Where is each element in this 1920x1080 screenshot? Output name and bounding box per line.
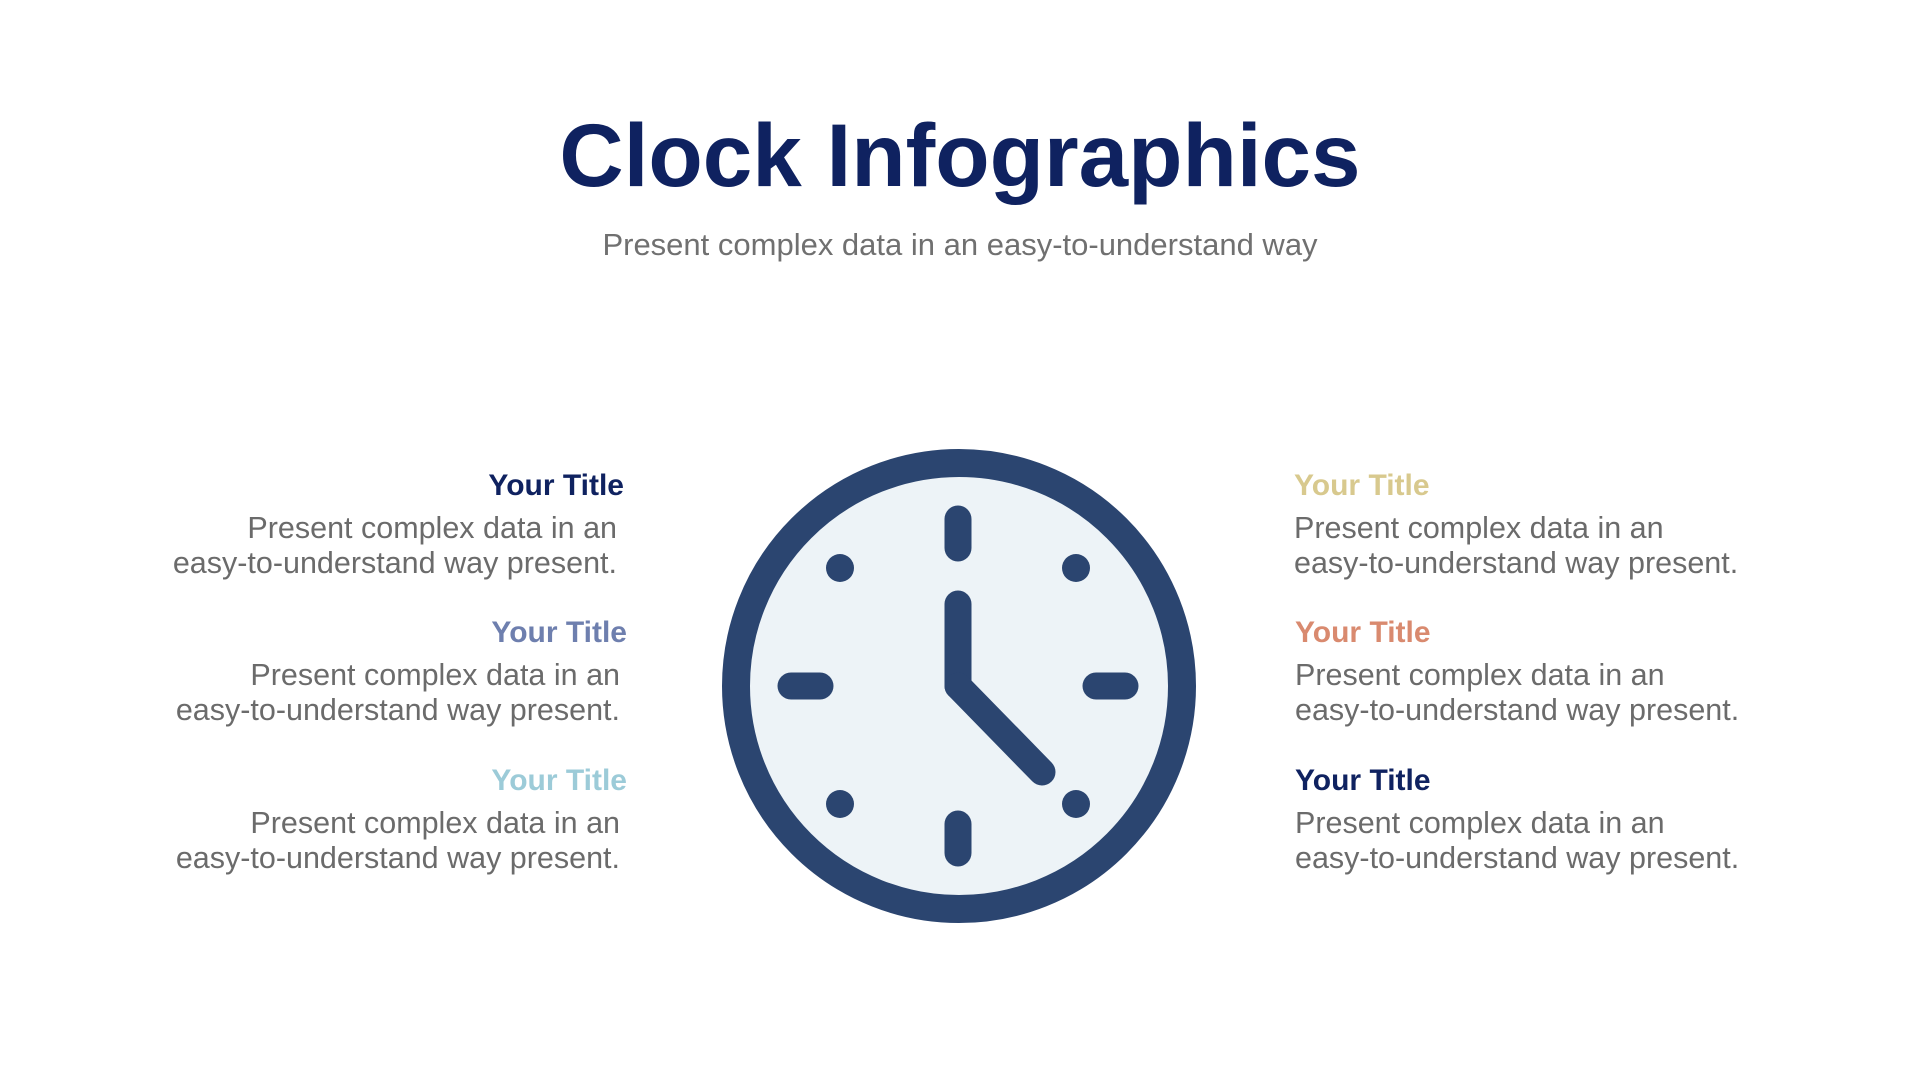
right item 1: Present complex data in an [1294,511,1664,545]
title: Clock Infographics [559,105,1361,205]
right item 2: easy-to-understand way present. [1295,692,1739,726]
right item 3: Your Title [1295,764,1431,797]
left item 3: Present complex data in an [250,806,620,840]
right item 2: Present complex data in an [1295,658,1665,692]
right item 3 [1295,764,1739,874]
left item 2: easy-to-understand way present. [176,692,620,726]
left item 2: Your Title [491,616,627,649]
right item 3: Present complex data in an [1295,806,1665,840]
right item 1: easy-to-understand way present. [1294,546,1738,580]
left item 1 [173,469,624,580]
right item 1: Your Title [1294,469,1430,502]
left item 3: Your Title [491,764,627,797]
left item 2: Present complex data in an [250,658,620,692]
right item 1 [1294,469,1738,580]
left item 3: easy-to-understand way present. [176,840,620,874]
left item 3 [176,764,627,874]
subtitle: Present complex data in an easy-to-understand way [602,227,1318,262]
right item 2: Your Title [1295,616,1431,649]
left item 2 [176,616,627,726]
right item 2 [1295,616,1739,726]
left item 1: easy-to-understand way present. [173,546,617,580]
left item 1: Your Title [488,469,624,502]
right item 3: easy-to-understand way present. [1295,840,1739,874]
left item 1: Present complex data in an [247,511,617,545]
